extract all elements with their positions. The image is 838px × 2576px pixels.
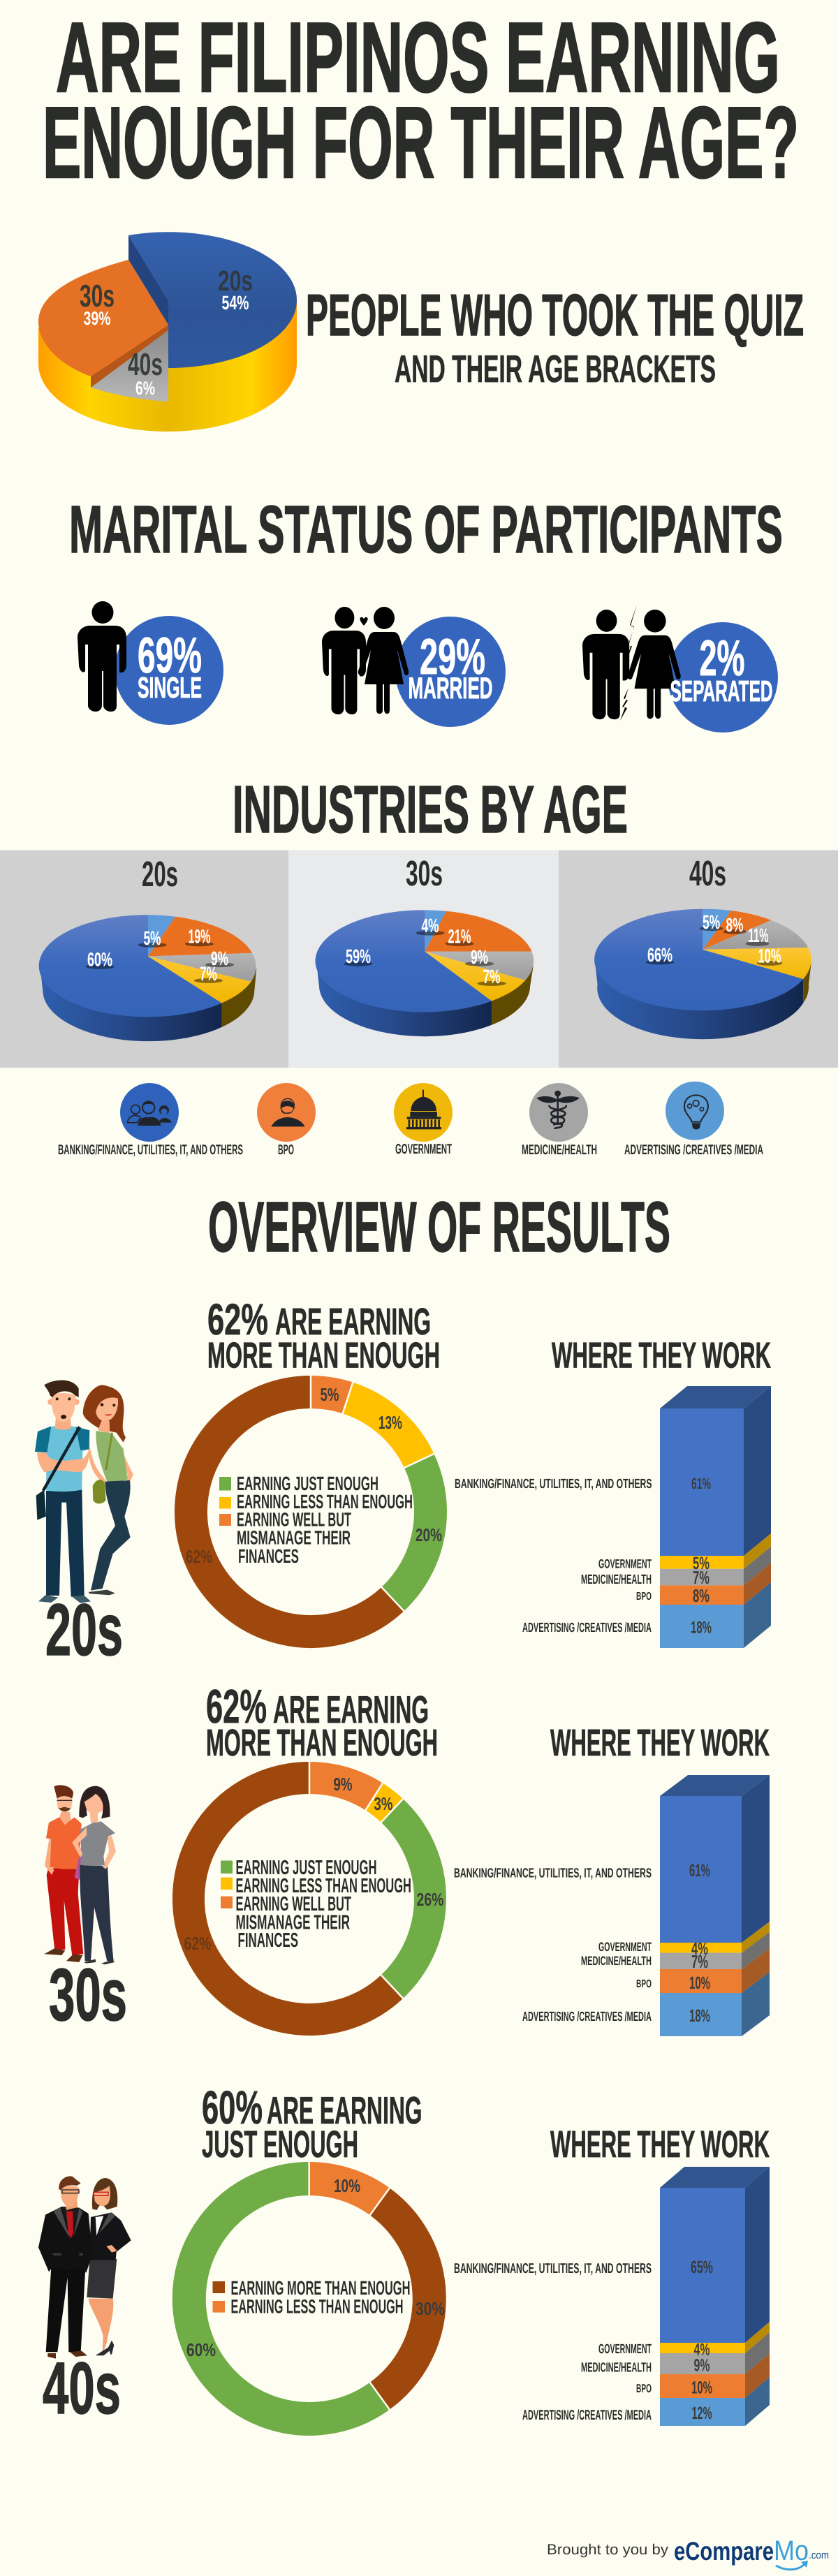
icon: lightbulb with gears xyxy=(684,1095,708,1129)
donut heading xyxy=(207,1295,440,1376)
donut heading xyxy=(202,2082,422,2165)
heading: 30s: 30s xyxy=(406,853,443,893)
icon: single person xyxy=(78,601,126,712)
age label: 30s: 30s xyxy=(49,1954,127,2036)
section: 40s results xyxy=(38,2082,770,2429)
legend label: BPO: BPO xyxy=(278,1142,294,1158)
pie chart: age brackets of quiz takers: 40s xyxy=(128,346,163,382)
pie chart: age brackets of quiz takers: 6% xyxy=(135,378,155,399)
stacked 3D bar: 61% xyxy=(691,1475,711,1492)
section: 20s results xyxy=(35,1295,771,1671)
donut heading: MORE THAN ENOUGH xyxy=(207,1335,440,1376)
pie chart: industries 20s: 19% xyxy=(189,926,211,947)
bar labels: GOVERNMENT xyxy=(598,2342,652,2357)
donut legend: EARNING WELL BUT xyxy=(237,1508,351,1531)
donut chart: 9% xyxy=(334,1774,352,1795)
donut chart: 20% xyxy=(416,1524,442,1545)
pie chart: industries 30s: 4% xyxy=(422,915,439,936)
legend label: medicine: MEDICINE/HEALTH xyxy=(522,1142,597,1158)
stacked 3D bar: 18% xyxy=(689,2006,710,2026)
age label: 40s: 40s xyxy=(43,2348,121,2429)
donut heading: 62% xyxy=(206,1680,267,1733)
pie chart: age brackets of quiz takers: 39% xyxy=(84,308,110,329)
bar labels: ADVERTISING /CREATIVES /MEDIA xyxy=(522,2408,652,2423)
stacked 3D bar: 5% xyxy=(693,1554,710,1573)
donut legend: EARNING LESS THAN ENOUGH xyxy=(230,2296,404,2317)
donut heading: JUST ENOUGH xyxy=(202,2124,358,2165)
legend label: banking: BANKING/FINANCE, UTILITIES, IT, AND OTHERS xyxy=(58,1142,243,1158)
donut chart: 30% xyxy=(416,2298,445,2319)
illustration: couple in their 20s xyxy=(35,1380,133,1603)
pie chart: industries 20s: 7% xyxy=(200,963,217,985)
donut legend: FINANCES xyxy=(237,1929,298,1952)
heading: 40s: 40s xyxy=(689,853,726,893)
donut chart xyxy=(186,1375,442,1632)
legend: medicine xyxy=(529,1083,588,1142)
bar labels xyxy=(454,1867,652,2024)
donut legend: EARNING JUST ENOUGH xyxy=(237,1473,378,1494)
marital: single xyxy=(78,601,223,725)
age label: 20s: 20s xyxy=(45,1589,123,1671)
marital: single: SINGLE xyxy=(138,671,202,704)
donut heading xyxy=(206,1680,438,1764)
icon: capitol building xyxy=(406,1090,441,1129)
bar labels: BANKING/FINANCE, UTILITIES, IT, AND OTHERS xyxy=(454,1867,652,1881)
stacked 3D bar: 4% xyxy=(691,1939,708,1959)
bar labels: MEDICINE/HEALTH xyxy=(581,1573,652,1587)
marital: married: MARRIED xyxy=(408,672,493,705)
illustration: couple in their 40s xyxy=(38,2176,131,2359)
icon: caduceus xyxy=(536,1091,580,1129)
donut chart: 62% xyxy=(186,1546,212,1567)
donut legend: EARNING MORE THAN ENOUGH xyxy=(230,2277,411,2299)
marital: married: 29% xyxy=(420,629,485,685)
donut chart: 13% xyxy=(378,1412,402,1433)
legend: government xyxy=(394,1083,453,1142)
stacked 3D bar: 61% xyxy=(689,1861,710,1881)
title xyxy=(43,2,799,199)
pie chart: industries 40s: 66% xyxy=(647,944,672,966)
pie chart: industries 20s: 9% xyxy=(211,948,228,969)
donut legend: EARNING LESS THAN ENOUGH xyxy=(236,1875,411,1897)
pie chart: age brackets of quiz takers: 20s xyxy=(218,265,253,297)
donut legend: EARNING WELL BUT xyxy=(236,1893,351,1915)
donut chart: 62% xyxy=(184,1933,211,1954)
icon: separated couple with lightning xyxy=(582,605,681,721)
stacked 3D bar: 4% xyxy=(694,2341,710,2360)
footer: brought to you by eCompareMo: Brought to you by xyxy=(547,2542,669,2558)
pie chart: age brackets of quiz takers: 54% xyxy=(222,292,249,314)
donut legend xyxy=(219,1473,413,1567)
icon: couple with heart xyxy=(322,607,409,714)
stacked 3D bar xyxy=(660,1386,771,1648)
panel: industries 40s xyxy=(559,851,838,1068)
bar labels: MEDICINE/HEALTH xyxy=(581,1954,652,1968)
pie chart: industries 40s: 11% xyxy=(749,925,769,946)
heading: 20s: 20s xyxy=(142,854,178,894)
bar labels xyxy=(455,1477,652,1635)
stacked 3D bar: 10% xyxy=(689,1973,710,1993)
stacked 3D bar xyxy=(660,2167,770,2426)
footer: brought to you by eCompareMo: .com xyxy=(809,2549,829,2561)
stacked 3D bar: 7% xyxy=(693,1567,710,1588)
bar labels xyxy=(454,2261,652,2423)
pie chart: industries 30s: 9% xyxy=(471,946,488,968)
footer: brought to you by eCompareMo: Mo xyxy=(774,2535,809,2566)
icon: office team xyxy=(128,1101,172,1126)
panel: industries 20s xyxy=(0,851,288,1068)
donut chart: 3% xyxy=(374,1793,392,1814)
marital: single: 69% xyxy=(138,628,202,684)
icon: call centre agent xyxy=(271,1098,305,1126)
donut legend xyxy=(212,2277,411,2317)
pie chart: industries 30s xyxy=(316,910,534,1036)
donut heading: MORE THAN ENOUGH xyxy=(206,1722,438,1764)
donut heading: 60% xyxy=(202,2082,263,2134)
donut heading: ARE EARNING xyxy=(275,1301,431,1343)
marital: separated xyxy=(582,605,778,733)
donut chart: 26% xyxy=(416,1889,444,1910)
section: 30s results xyxy=(44,1680,770,2036)
donut chart: 5% xyxy=(320,1384,339,1405)
bar labels: ADVERTISING /CREATIVES /MEDIA xyxy=(522,2010,652,2024)
bar labels: BANKING/FINANCE, UTILITIES, IT, AND OTHERS xyxy=(454,2261,652,2276)
donut legend xyxy=(221,1857,411,1952)
stacked 3D bar: 12% xyxy=(691,2404,712,2423)
stacked 3D bar: 10% xyxy=(691,2378,712,2398)
stacked 3D bar: 8% xyxy=(693,1585,710,1606)
pie chart: industries 40s: 10% xyxy=(758,945,781,966)
stacked 3D bar: 18% xyxy=(691,1619,712,1637)
donut chart xyxy=(184,1761,444,2019)
legend label: government: GOVERNMENT xyxy=(395,1142,452,1157)
donut heading: ARE EARNING xyxy=(267,2089,422,2132)
donut legend: EARNING LESS THAN ENOUGH xyxy=(237,1491,413,1513)
bar labels: MEDICINE/HEALTH xyxy=(581,2360,652,2375)
stacked 3D bar: 7% xyxy=(691,1951,708,1972)
pie chart: industries 40s: 8% xyxy=(726,914,744,936)
legend: advertising xyxy=(666,1082,724,1140)
pie chart: industries 30s: 21% xyxy=(448,926,471,947)
stacked 3D bar: 65% xyxy=(691,2258,713,2277)
pie chart: industries 30s: 7% xyxy=(483,966,501,987)
marital: married xyxy=(322,607,506,727)
donut legend: EARNING JUST ENOUGH xyxy=(236,1857,377,1879)
legend: banking xyxy=(120,1083,179,1142)
pie chart: industries 20s: 60% xyxy=(87,948,112,971)
pie chart: industries 40s: 5% xyxy=(703,911,720,933)
pie chart: industries 30s: 59% xyxy=(346,945,371,967)
footer: brought to you by eCompareMo: eCompare xyxy=(674,2537,774,2566)
pie chart: age brackets of quiz takers xyxy=(38,232,297,432)
bar labels: BPO xyxy=(636,1978,652,1990)
stacked 3D bar: 9% xyxy=(694,2356,710,2376)
donut heading: 62% xyxy=(207,1295,268,1344)
pie chart: age brackets of quiz takers: 30s xyxy=(80,278,115,314)
illustration: couple in their 30s xyxy=(44,1785,116,1964)
marital: separated: 2% xyxy=(700,631,744,686)
bar labels: ADVERTISING /CREATIVES /MEDIA xyxy=(522,1621,652,1635)
bar labels: BANKING/FINANCE, UTILITIES, IT, AND OTHERS xyxy=(455,1477,652,1492)
footer: brought to you by eCompareMo xyxy=(547,2535,829,2570)
donut chart xyxy=(186,2161,445,2419)
legend: BPO xyxy=(257,1083,316,1142)
pie chart: industries 40s xyxy=(594,909,811,1039)
donut chart: 10% xyxy=(334,2175,360,2196)
donut legend: MISMANAGE THEIR xyxy=(237,1526,351,1549)
stacked 3D bar xyxy=(660,1775,770,2036)
donut chart: 60% xyxy=(186,2339,216,2360)
bar labels: BPO xyxy=(636,2382,652,2395)
donut legend: MISMANAGE THEIR xyxy=(236,1912,350,1934)
bar labels: GOVERNMENT xyxy=(598,1940,652,1954)
pie chart: industries 20s: 5% xyxy=(144,927,161,949)
donut legend: FINANCES xyxy=(238,1545,299,1567)
bar labels: BPO xyxy=(636,1591,652,1603)
pie chart: industries 20s xyxy=(39,915,256,1041)
panel: industries 30s xyxy=(288,851,559,1068)
donut heading: ARE EARNING xyxy=(273,1688,429,1731)
bar labels: GOVERNMENT xyxy=(598,1557,652,1571)
